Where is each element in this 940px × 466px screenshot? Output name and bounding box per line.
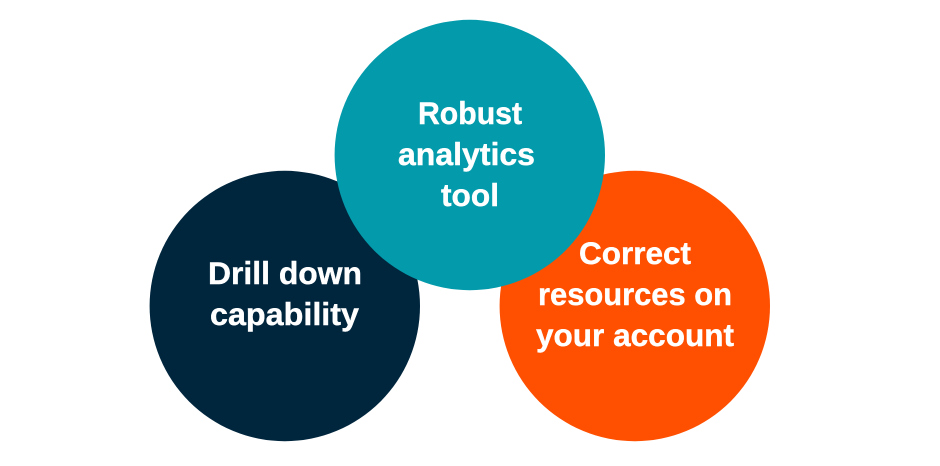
label: robust analytics tool: tool [441, 177, 499, 213]
label: correct resources on your account: resources on [538, 276, 732, 312]
label: robust analytics tool [398, 95, 535, 213]
label: drill down capability [208, 255, 362, 332]
label: correct resources on your account [536, 235, 734, 353]
label: robust analytics tool: analytics [398, 136, 535, 172]
label: robust analytics tool: Robust [418, 95, 522, 131]
panel: correct resources on your account [500, 171, 770, 441]
panel: robust analytics tool [335, 20, 605, 290]
panel: drill down capability [150, 171, 420, 441]
label: correct resources on your account: Correct [579, 235, 691, 271]
label: drill down capability: capability [210, 296, 359, 332]
label: drill down capability: Drill down [208, 255, 362, 291]
label: correct resources on your account: your account [536, 317, 734, 353]
